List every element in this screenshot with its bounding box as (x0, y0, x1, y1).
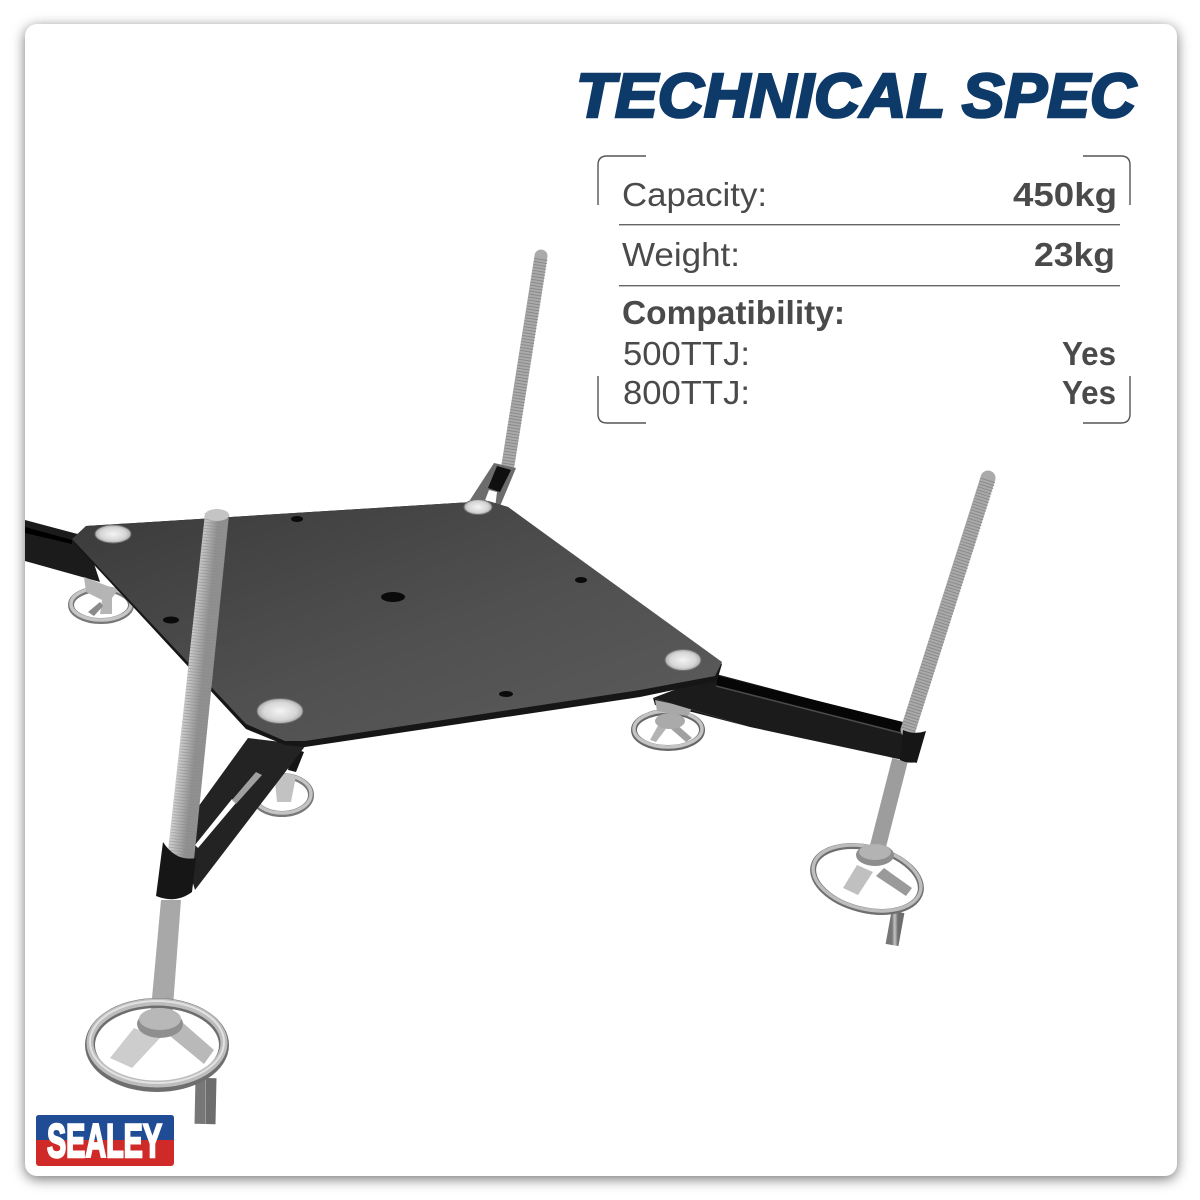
divider 1 (619, 224, 1120, 225)
compatibility heading: Compatibility: (622, 294, 845, 331)
rear wheel under plate, front (253, 748, 311, 814)
rear threaded rod (508, 256, 541, 465)
front threaded rod (167, 509, 229, 860)
800TTJ row (623, 374, 1116, 411)
divider 2 (619, 285, 1120, 286)
rear left arm (25, 520, 100, 582)
spec table (598, 156, 1130, 423)
500TTJ row: 500TTJ: (623, 335, 750, 372)
500TTJ row: Yes (1062, 335, 1116, 372)
front hand wheel (90, 1001, 224, 1124)
right collar (900, 730, 926, 763)
corner brackets (598, 156, 1130, 423)
logo: SEALEY: SEALEY (47, 1114, 162, 1167)
weight row (622, 236, 1115, 273)
logo: SEALEY (36, 1114, 174, 1167)
right hand wheel (806, 835, 928, 945)
capacity row: 450kg (1013, 176, 1117, 213)
right arm (653, 674, 917, 763)
weight row: 23kg (1034, 236, 1115, 273)
title: TECHNICAL SPEC (576, 62, 1137, 131)
rear left wheel (71, 577, 131, 621)
front collar (156, 842, 196, 899)
capacity row (622, 176, 1117, 213)
plate bolts (95, 500, 701, 724)
800TTJ row: Yes (1062, 374, 1116, 411)
weight row: Weight: (622, 236, 740, 273)
front arm (172, 738, 306, 890)
plate (72, 500, 722, 747)
front lower rod (150, 900, 181, 1020)
rear bracket (470, 463, 516, 511)
product: lifting table (25, 256, 988, 1124)
800TTJ row: 800TTJ: (623, 374, 750, 411)
plate holes (163, 516, 587, 697)
capacity row: Capacity: (622, 176, 767, 213)
right threaded rod (877, 478, 988, 850)
500TTJ row (623, 335, 1116, 372)
wheel under plate, right (634, 698, 750, 748)
